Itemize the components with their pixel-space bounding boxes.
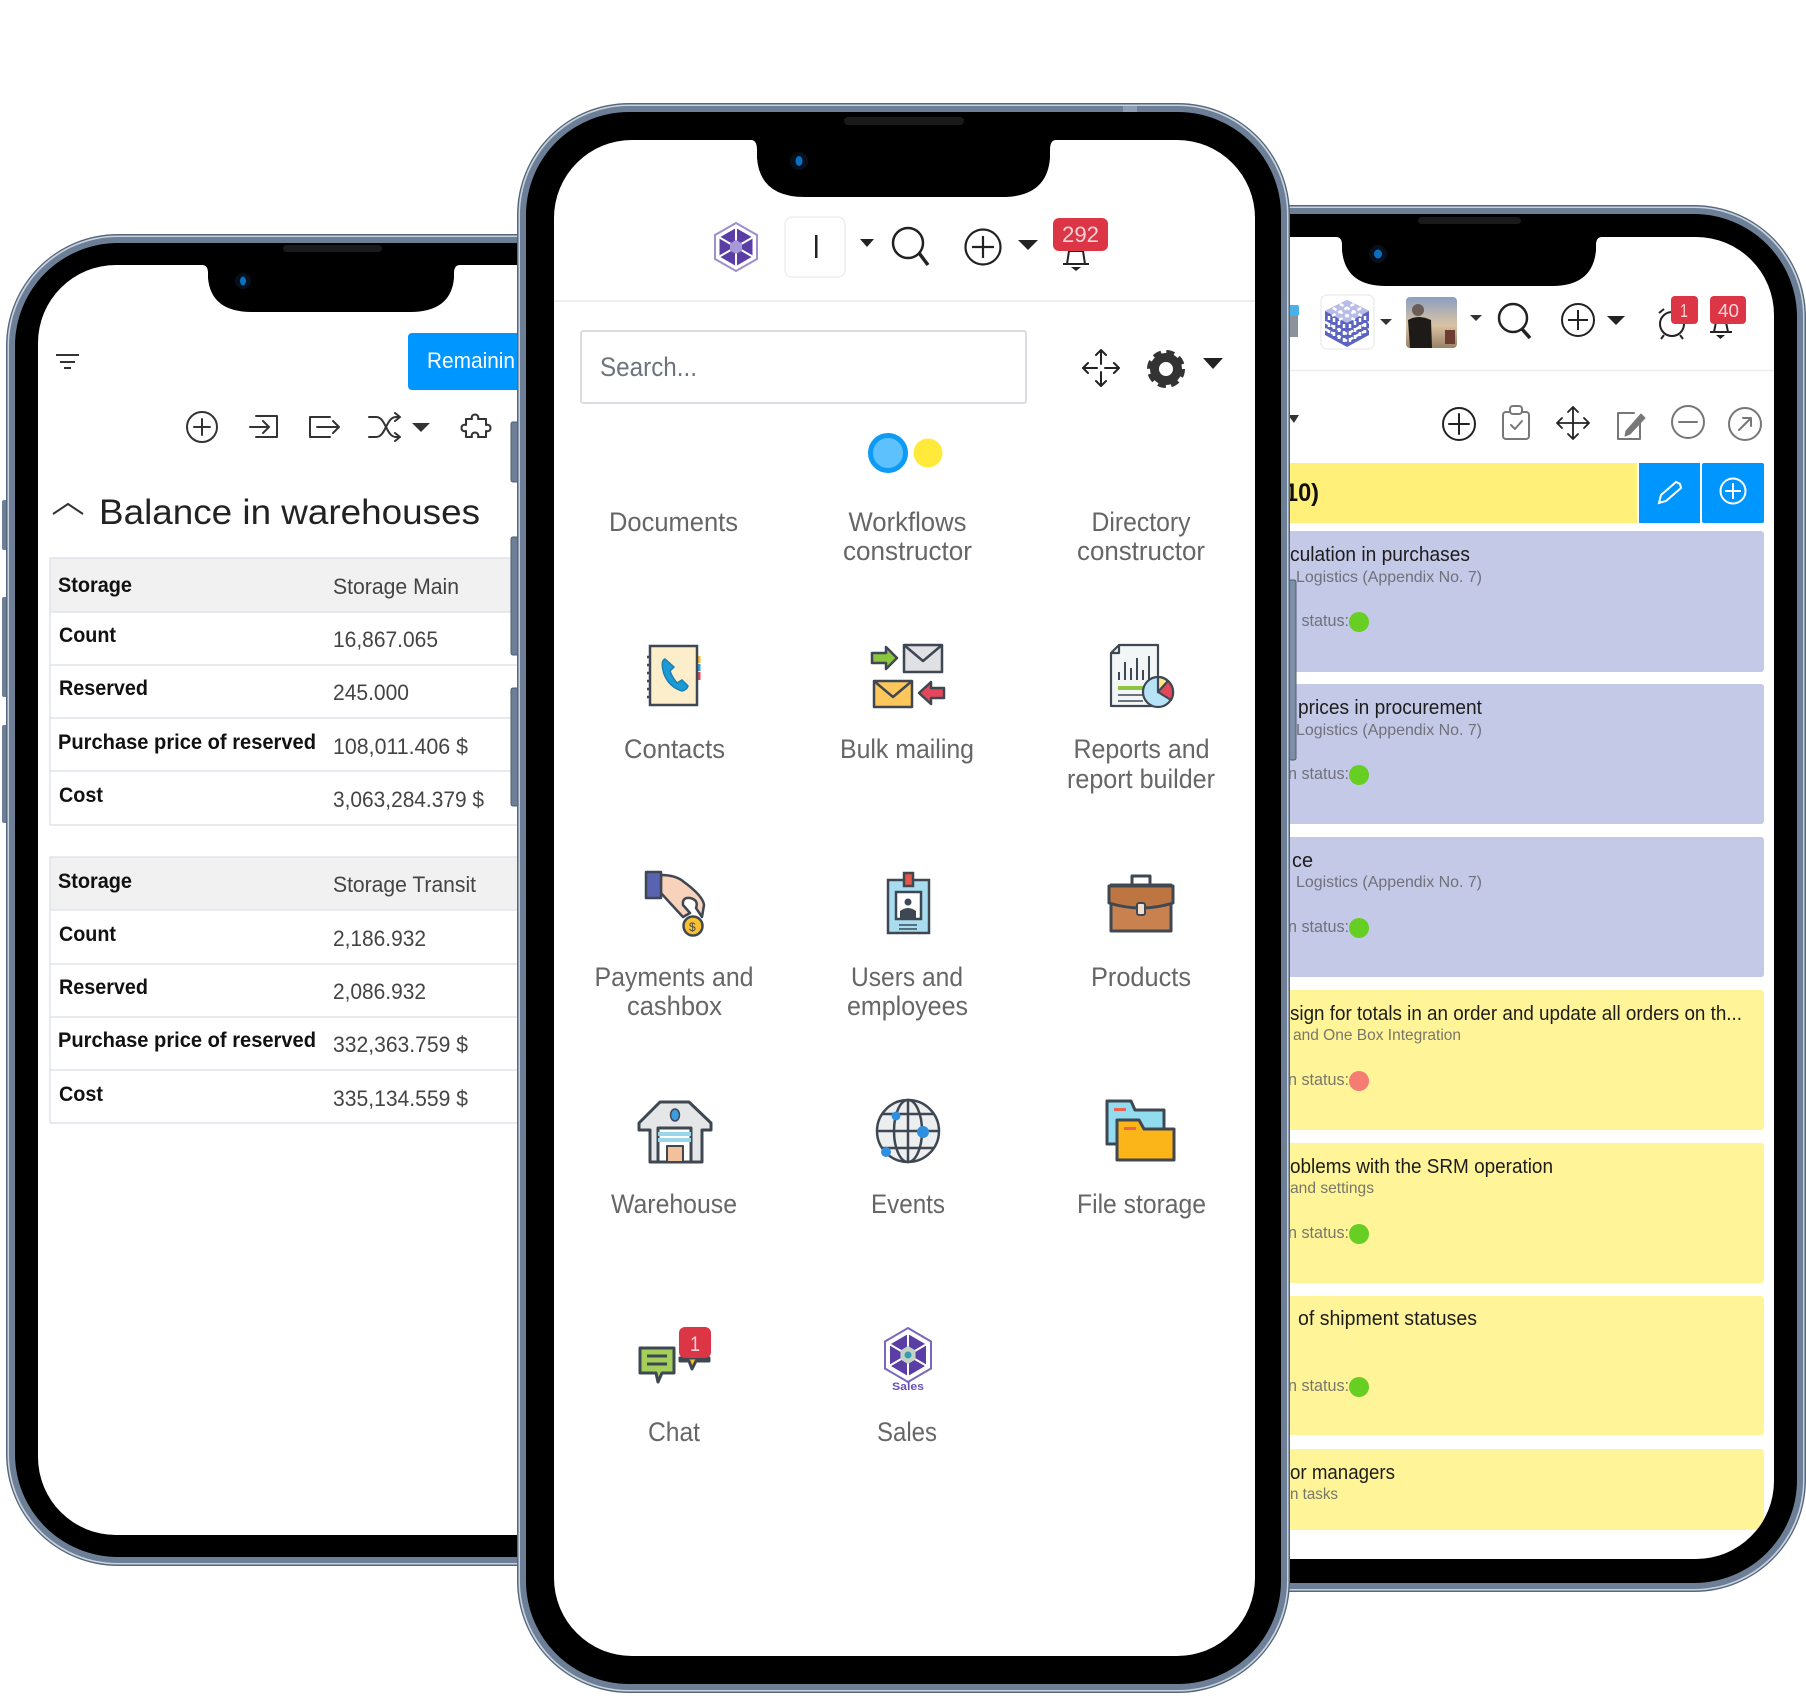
icon: search xyxy=(893,228,928,265)
icon: products xyxy=(1109,876,1173,931)
icon: bell with badge: 292 xyxy=(1062,222,1099,247)
caret xyxy=(1203,358,1223,369)
icon: chat with badge: 1 xyxy=(690,1333,700,1356)
icon: reports xyxy=(1111,645,1173,707)
icon: sales logo: Sales xyxy=(892,1381,924,1393)
icon: bulk mailing xyxy=(872,645,944,707)
table: storage main: Reserved xyxy=(59,676,148,700)
icon: add xyxy=(966,230,1000,264)
heading: balance in warehouses: Balance in warehouses xyxy=(99,493,480,532)
icon: file storage xyxy=(1107,1101,1174,1160)
card: totals sign: and One Box Integration xyxy=(1293,1027,1461,1044)
header bar: yellow group: 10) xyxy=(1285,479,1319,507)
label: events: Events xyxy=(871,1189,945,1219)
label: users and employees xyxy=(847,962,968,1021)
icon: filter xyxy=(56,355,79,368)
card: srm problems xyxy=(1250,1143,1764,1283)
table: storage main: Storage Main xyxy=(333,574,459,599)
icon: move xyxy=(1083,350,1119,386)
button: add xyxy=(1702,463,1764,523)
caret xyxy=(1018,240,1038,250)
card: procurement prices: n status: xyxy=(1288,764,1349,783)
card: managers xyxy=(1250,1449,1764,1530)
table: storage main: 245.000 xyxy=(333,680,409,705)
icon: search xyxy=(1499,304,1530,338)
card: srm problems: n status: xyxy=(1288,1223,1349,1242)
card: srm problems: oblems with the SRM operation xyxy=(1290,1156,1553,1178)
table: storage transit: Purchase price of reserved xyxy=(58,1028,316,1052)
card: purchases calculation: culation in purchases xyxy=(1290,544,1470,566)
caret xyxy=(860,239,874,247)
card: srm problems: and settings xyxy=(1290,1180,1374,1197)
label: reports and report builder xyxy=(1067,734,1215,794)
phone: left, balance in warehouses xyxy=(2,234,766,1566)
icon: chat with badge xyxy=(640,1327,711,1382)
table: storage transit: Reserved xyxy=(59,975,148,999)
card: totals sign: n status: xyxy=(1288,1070,1349,1089)
card: shipment statuses: n status: xyxy=(1288,1376,1349,1395)
label: users and employees: employees xyxy=(847,991,968,1021)
phone: right, task list xyxy=(1290,205,1806,1592)
icon: settings gear xyxy=(1150,353,1182,385)
caret xyxy=(1607,316,1625,325)
icon: payments xyxy=(646,872,704,936)
toolbar icons xyxy=(1443,406,1761,440)
label: reports and report builder: Reports and xyxy=(1074,734,1210,764)
label: workflows constructor: constructor xyxy=(843,536,972,566)
table: storage main: Count xyxy=(59,623,116,647)
table: storage main: 16,867.065 xyxy=(333,627,438,652)
icon: bell with badge: 40 xyxy=(1718,301,1739,321)
label: workflows constructor: Workflows xyxy=(848,507,966,537)
icon: add xyxy=(1562,304,1594,336)
table: storage main: Purchase price of reserved xyxy=(58,730,316,754)
icon: alarm clock with badge xyxy=(1659,296,1698,339)
caret xyxy=(1288,415,1299,423)
label: products: Products xyxy=(1091,962,1191,992)
card: managers: n tasks xyxy=(1290,1486,1338,1503)
label: file storage: File storage xyxy=(1077,1189,1206,1219)
logo: cube xyxy=(1321,295,1374,349)
card: logistics: n status: xyxy=(1288,917,1349,936)
card: procurement prices: prices in procurement xyxy=(1298,697,1482,719)
caret xyxy=(412,423,430,432)
icon: contacts xyxy=(647,646,700,705)
table: storage transit: 332,363.759 $ xyxy=(333,1032,468,1057)
search box: Search... xyxy=(600,352,697,382)
label: sales: Sales xyxy=(877,1417,937,1447)
table: storage transit: Count xyxy=(59,922,116,946)
card: logistics: Logistics (Appendix No. 7) xyxy=(1296,874,1482,891)
card: procurement prices: Logistics (Appendix No. 7) xyxy=(1296,722,1482,739)
label: bulk mailing: Bulk mailing xyxy=(840,734,974,764)
card: procurement prices xyxy=(1250,684,1764,824)
table: storage transit: 2,186.932 xyxy=(333,926,426,951)
card: totals sign xyxy=(1250,990,1764,1130)
table: storage main: Cost xyxy=(59,783,103,807)
label: payments and cashbox xyxy=(594,962,754,1021)
label: directory constructor: constructor xyxy=(1077,536,1205,566)
label: payments and cashbox: cashbox xyxy=(627,991,722,1021)
card: totals sign: sign for totals in an order and update all orders on th... xyxy=(1290,1003,1742,1025)
icon: partial app icon xyxy=(1290,305,1299,337)
toolbar icons xyxy=(187,412,490,442)
card: logistics xyxy=(1250,837,1764,977)
table: storage main xyxy=(50,558,570,825)
icon: workflow dots xyxy=(870,436,942,470)
user avatar box xyxy=(785,217,845,277)
label: warehouse: Warehouse xyxy=(611,1189,737,1219)
label: reports and report builder: report builder xyxy=(1067,764,1215,794)
card: managers: or managers xyxy=(1290,1462,1395,1484)
table: storage transit: 2,086.932 xyxy=(333,979,426,1004)
label: users and employees: Users and xyxy=(851,962,963,992)
icon: events globe xyxy=(877,1100,939,1162)
label: directory constructor xyxy=(1077,507,1205,566)
table: storage main: 108,011.406 $ xyxy=(333,734,468,759)
table: storage transit: Cost xyxy=(59,1082,103,1106)
icon: bell with badge xyxy=(1710,296,1746,339)
table: storage transit: Storage Transit xyxy=(333,872,476,897)
caret xyxy=(1470,315,1482,321)
label: documents: Documents xyxy=(609,507,738,537)
label: contacts: Contacts xyxy=(624,734,725,764)
icon: collapse chevron xyxy=(53,504,83,514)
button: edit xyxy=(1639,463,1700,523)
icon: alarm clock with badge: 1 xyxy=(1680,301,1688,321)
icon: users xyxy=(888,873,929,933)
card: shipment statuses xyxy=(1250,1296,1764,1435)
icon: payments: $ xyxy=(689,920,696,934)
header bar: yellow group xyxy=(1250,463,1637,523)
button: remaining: Remainin xyxy=(427,348,515,373)
card: purchases calculation: n status: xyxy=(1288,611,1349,630)
label: directory constructor: Directory xyxy=(1092,507,1191,537)
button: remaining xyxy=(408,333,538,390)
table: storage transit xyxy=(50,857,570,1123)
search box xyxy=(581,331,1026,403)
table: storage main: 3,063,284.379 $ xyxy=(333,787,484,812)
card: purchases calculation: Logistics (Appendix No. 7) xyxy=(1296,569,1482,586)
table: storage main: Storage xyxy=(58,573,132,597)
table: storage transit: 335,134.559 $ xyxy=(333,1086,468,1111)
card: shipment statuses: of shipment statuses xyxy=(1298,1308,1477,1330)
label: chat: Chat xyxy=(648,1417,700,1447)
icon: sales logo xyxy=(885,1328,931,1393)
caret xyxy=(1380,319,1392,325)
label: workflows constructor xyxy=(843,507,972,566)
table: storage transit: Storage xyxy=(58,869,132,893)
card: purchases calculation xyxy=(1250,531,1764,672)
icon: bell with badge xyxy=(1053,218,1108,271)
avatar photo xyxy=(1406,297,1457,348)
card: logistics: ce xyxy=(1292,850,1313,872)
phone: center, app menu xyxy=(511,103,1296,1693)
icon: warehouse xyxy=(639,1102,711,1162)
label: payments and cashbox: Payments and xyxy=(594,962,754,992)
logo: hexagon xyxy=(715,223,757,271)
